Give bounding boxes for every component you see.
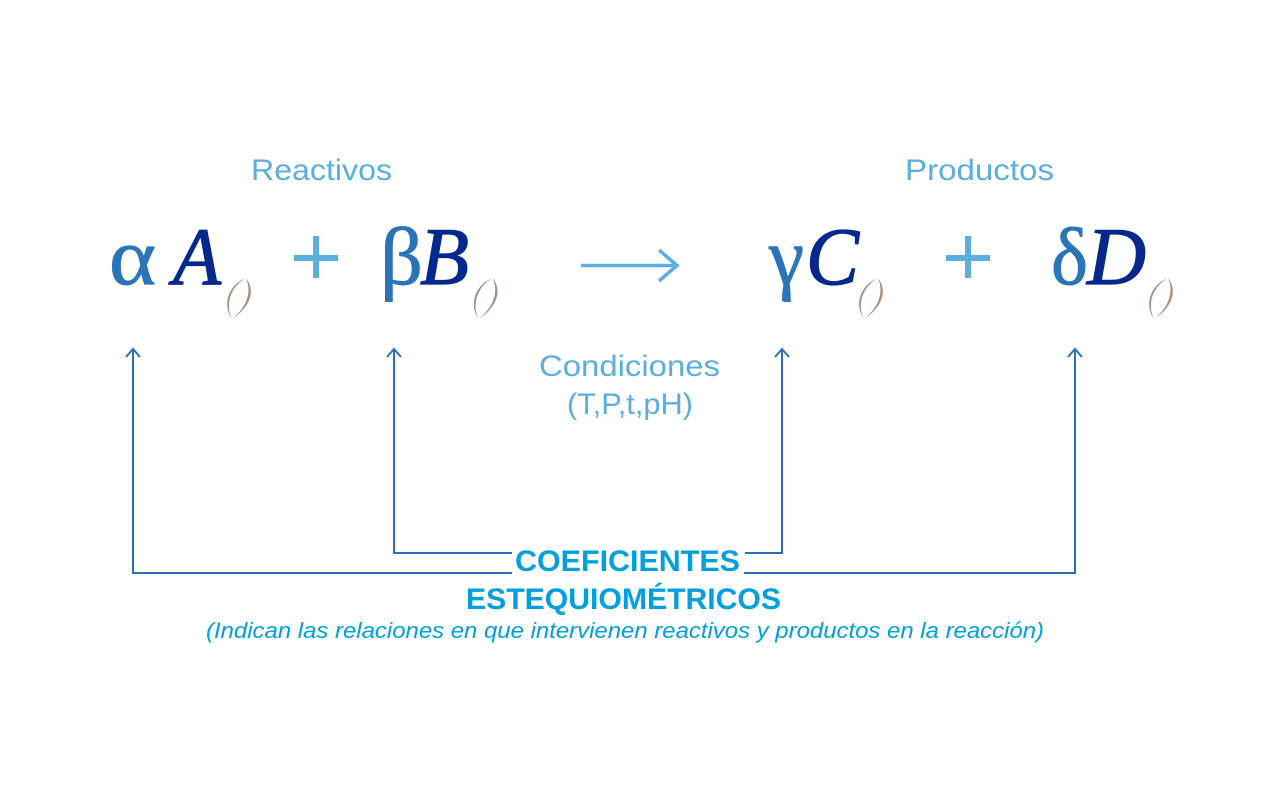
- arrow: inner bracket to gamma: [745, 349, 789, 553]
- text: conditions: (T,P,t,pH): [567, 388, 693, 421]
- plus sign: products: [946, 236, 990, 278]
- term: delta D: δ: [1051, 211, 1088, 302]
- arrow: inner bracket to beta: [387, 349, 512, 553]
- term: alpha A: [109, 211, 251, 319]
- note: explanation: (Indican las relaciones en que intervienen reactivos y productos en la reacción): [206, 618, 1044, 643]
- term: alpha A: α: [109, 211, 156, 302]
- heading: Productos: Productos: [905, 154, 1054, 187]
- title: coefficients: [466, 545, 781, 616]
- term: beta B: β: [380, 211, 423, 302]
- term: delta D: [1051, 211, 1173, 319]
- arrow: outer bracket to alpha: [126, 349, 512, 573]
- term: gamma C: C: [806, 211, 860, 302]
- term: delta D: D: [1086, 211, 1146, 302]
- term: alpha A: A: [168, 211, 222, 302]
- term: beta B: B: [420, 211, 469, 302]
- title: coefficients: ESTEQUIOMÉTRICOS: [466, 582, 781, 616]
- title: coefficients: COEFICIENTES: [515, 545, 740, 578]
- term: gamma C: γ: [768, 211, 804, 302]
- arrow: reaction direction: [581, 250, 677, 281]
- heading: Reactivos: Reactivos: [251, 154, 392, 187]
- plus sign: reactants: [294, 236, 338, 278]
- text: conditions: Condiciones: [539, 350, 720, 383]
- term: beta B: [380, 211, 498, 319]
- arrow: outer bracket to delta: [744, 349, 1082, 573]
- term: gamma C: [768, 211, 883, 319]
- text: conditions: [539, 350, 720, 421]
